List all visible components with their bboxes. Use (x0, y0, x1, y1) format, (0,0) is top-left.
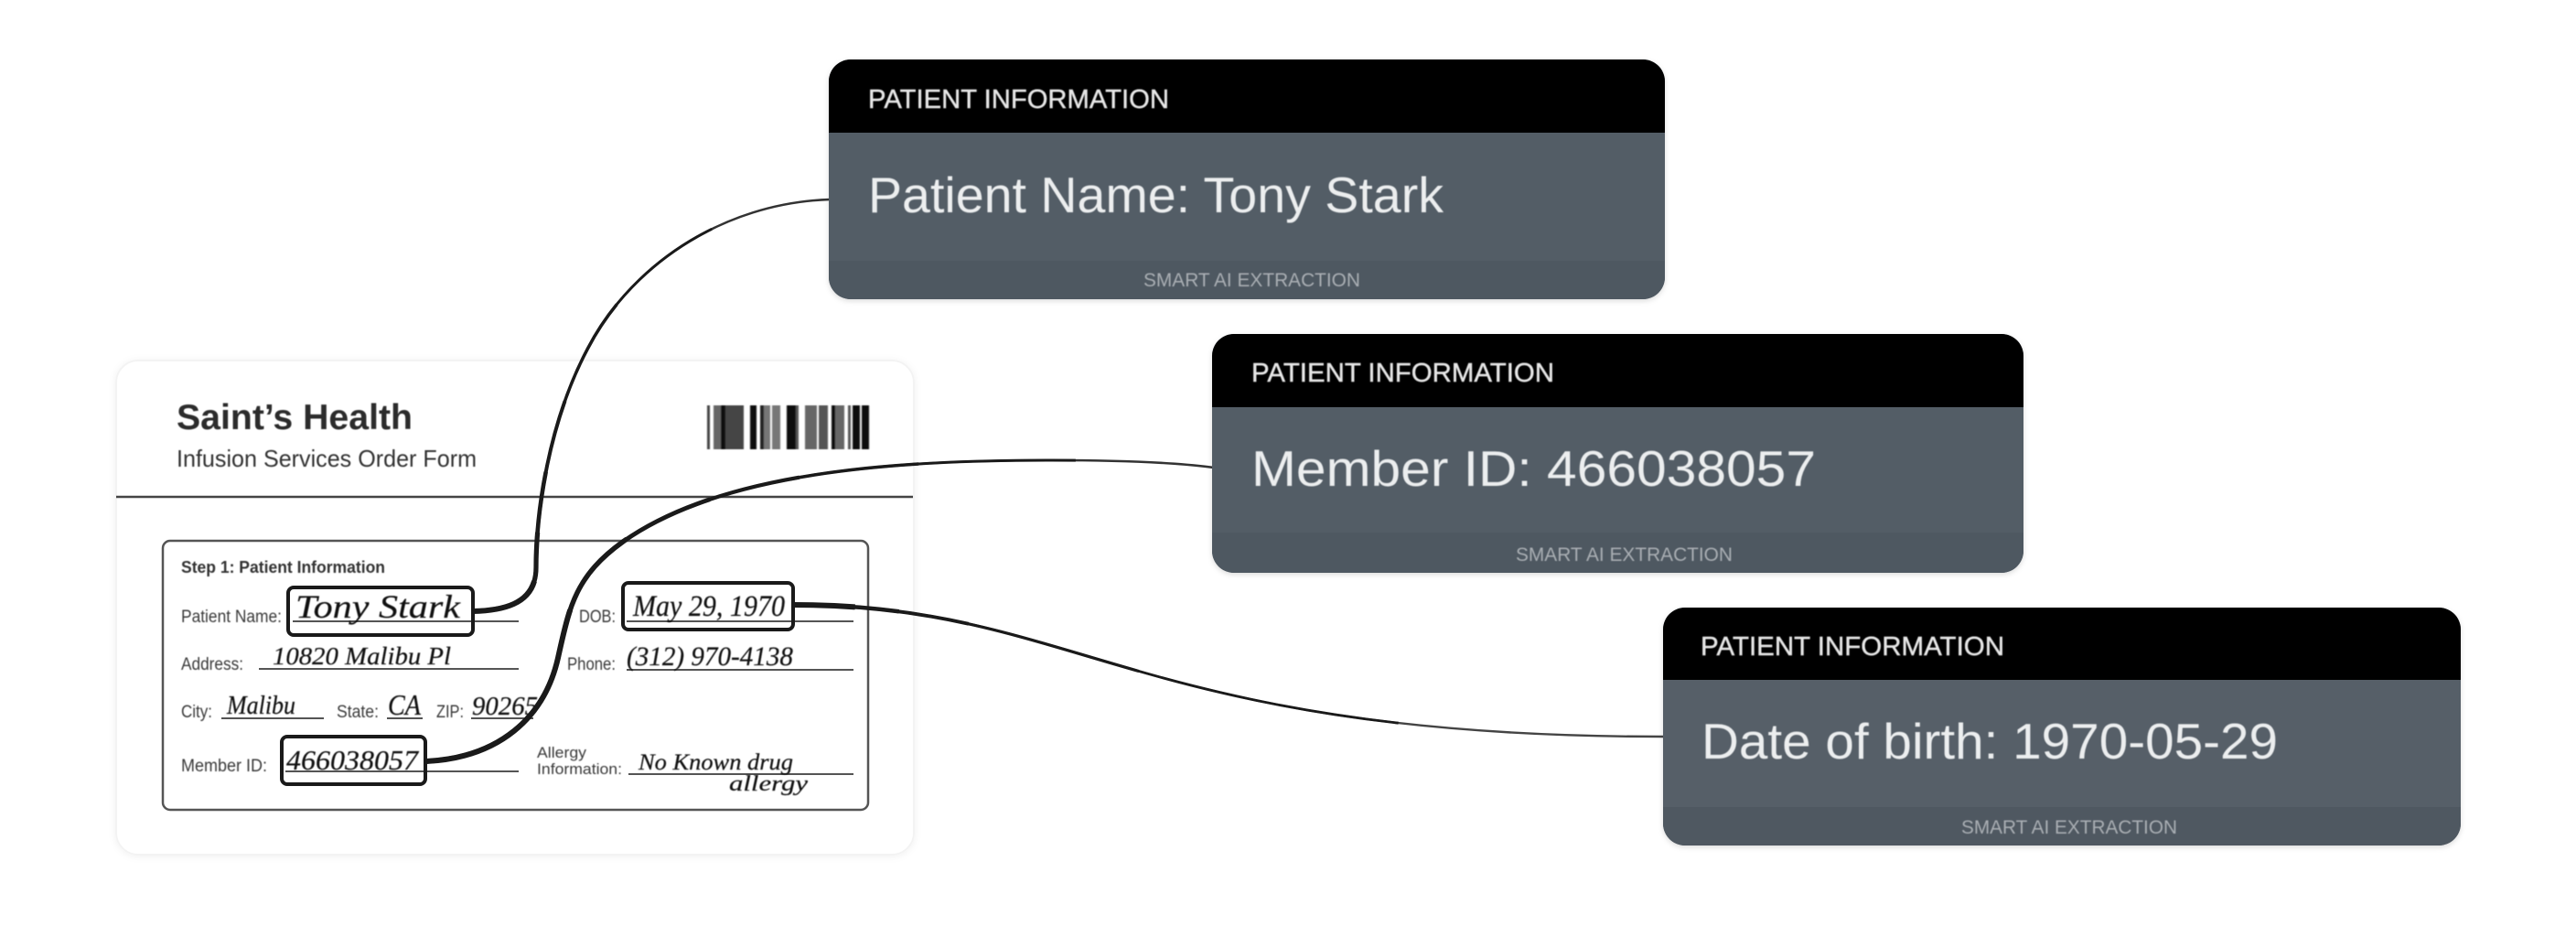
field: zip: ZIP: (436, 703, 464, 722)
field: zip: 90265 (472, 693, 538, 721)
field: state (337, 688, 423, 722)
panel: step 1 patient information box (163, 541, 868, 810)
card footer: SMART AI EXTRACTION (1516, 544, 1733, 565)
card header: PATIENT INFORMATION (1251, 359, 1554, 388)
field: phone: (312) 970-4138 (627, 641, 793, 672)
icon: barcode (707, 405, 869, 449)
card header: PATIENT INFORMATION (868, 85, 1169, 114)
panel: order form document (116, 361, 914, 855)
field: date of birth (579, 583, 853, 630)
connector: member id to card (426, 460, 1214, 761)
field: zip (436, 693, 538, 722)
card: patient name (829, 59, 1665, 299)
card footer: SMART AI EXTRACTION (1961, 817, 2177, 838)
field: allergy information: allergy (729, 772, 808, 796)
field: member id: 466038057 (286, 744, 420, 776)
extracted value: Patient Name: Tony Stark (868, 167, 1444, 223)
field: state: State: (337, 703, 379, 722)
subheading: form name: Infusion Services Order Form (177, 445, 477, 472)
card: date of birth (1663, 608, 2461, 845)
field: city (181, 692, 324, 722)
heading: step 1: Step 1: Patient Information (181, 558, 385, 576)
field: allergy information: Allergy (537, 744, 587, 761)
field: address (181, 642, 519, 674)
field: date of birth: DOB: (579, 608, 616, 627)
field: allergy information: Information: (537, 760, 622, 778)
field: city: City: (181, 703, 212, 722)
field: patient name (181, 587, 519, 635)
connector: patient name to card (473, 199, 830, 611)
field: address: Address: (181, 655, 243, 674)
field: address: 10820 Malibu Pl (273, 642, 451, 670)
field: date of birth: May 29, 1970 (632, 590, 785, 623)
field: patient name: Patient Name: (181, 608, 282, 627)
heading: Saint's Health: Saint’s Health (177, 398, 413, 437)
field: allergy information: No Known drug (638, 750, 793, 775)
extracted value: Member ID: 466038057 (1251, 440, 1816, 497)
field: city: Malibu (226, 692, 295, 720)
field: allergy information (537, 744, 853, 796)
field: patient name: Tony Stark (295, 588, 461, 625)
field: phone: Phone: (567, 655, 616, 674)
card footer: SMART AI EXTRACTION (1143, 270, 1360, 291)
field: phone (567, 641, 853, 674)
field: member id (181, 737, 519, 784)
card header: PATIENT INFORMATION (1701, 632, 2004, 662)
field: state: CA (388, 688, 421, 721)
extracted value: Date of birth: 1970-05-29 (1701, 713, 2278, 770)
field: member id: Member ID: (181, 757, 267, 776)
connector: date of birth to card (793, 605, 1663, 737)
card: member id (1212, 334, 2023, 573)
